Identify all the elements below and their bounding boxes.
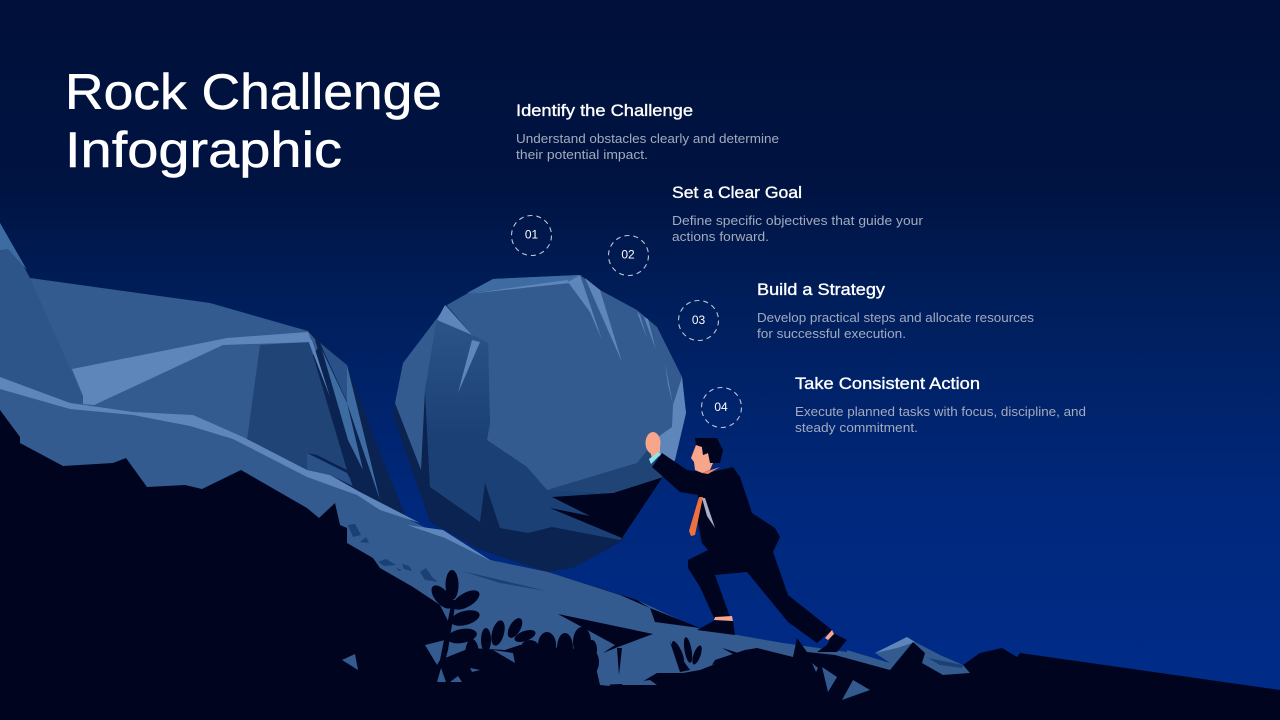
man suit and legs bbox=[652, 453, 832, 643]
boulder shaded body bbox=[425, 275, 686, 540]
step 04 bbox=[702, 374, 1086, 435]
boulder underside bbox=[550, 472, 666, 538]
illustration: businessman pushing boulder bbox=[646, 432, 847, 652]
title bbox=[65, 64, 442, 178]
marker 04: 04 bbox=[714, 400, 728, 414]
slope highlight bbox=[0, 377, 420, 523]
description 03: for successful execution. bbox=[757, 326, 906, 341]
description 03 bbox=[757, 310, 1035, 341]
description 02: actions forward. bbox=[672, 229, 769, 244]
man head bbox=[691, 438, 723, 473]
description 02 bbox=[672, 213, 924, 244]
description 01: Understand obstacles clearly and determine bbox=[516, 131, 779, 146]
man shoes bbox=[697, 620, 735, 635]
marker 02 bbox=[608, 236, 648, 276]
marker 02: 02 bbox=[621, 248, 635, 262]
marker 03: 03 bbox=[692, 313, 705, 327]
boulder left lobe bbox=[425, 320, 527, 487]
illustration: boulder bbox=[392, 275, 686, 572]
man ankles bbox=[714, 616, 733, 621]
description 03: Develop practical steps and allocate resources bbox=[757, 310, 1035, 325]
man hand bbox=[646, 432, 660, 458]
slope pebbles bbox=[348, 524, 361, 537]
heading 01: Identify the Challenge bbox=[516, 101, 693, 120]
title: Rock Challenge bbox=[65, 64, 442, 120]
man tie bbox=[689, 497, 703, 536]
description 04: Execute planned tasks with focus, discipline, and bbox=[795, 404, 1086, 419]
description 01 bbox=[516, 131, 779, 162]
title: Infographic bbox=[65, 122, 342, 178]
description 01: their potential impact. bbox=[516, 147, 648, 162]
illustration: dark foreground silhouette bbox=[0, 410, 1280, 720]
boulder shadow bbox=[392, 380, 625, 572]
man collar bbox=[702, 467, 720, 474]
man cuff bbox=[649, 452, 661, 464]
marker 03 bbox=[678, 300, 718, 340]
marker 01 bbox=[512, 216, 552, 256]
marker 01: 01 bbox=[525, 228, 538, 242]
illustration: blue gaps in foreground bbox=[342, 650, 870, 700]
heading 03: Build a Strategy bbox=[757, 280, 886, 299]
illustration: distant rock on the right bbox=[847, 637, 972, 680]
step 03 bbox=[678, 280, 1035, 341]
slope crack shadows bbox=[462, 571, 547, 591]
illustration: foreground plants bbox=[428, 570, 759, 684]
description 04: steady commitment. bbox=[795, 420, 918, 435]
description 02: Define specific objectives that guide your bbox=[672, 213, 924, 228]
illustration: rock slab on the left bbox=[0, 223, 420, 530]
illustration: sloped hillside bbox=[0, 377, 960, 700]
boulder face bbox=[447, 275, 686, 493]
heading 02: Set a Clear Goal bbox=[672, 183, 802, 202]
man shirt bbox=[702, 498, 715, 528]
description 04 bbox=[795, 404, 1086, 435]
step 01 bbox=[512, 101, 779, 256]
boulder highlights bbox=[467, 275, 580, 293]
heading 04: Take Consistent Action bbox=[795, 374, 980, 393]
marker 04 bbox=[702, 388, 742, 428]
step 02 bbox=[608, 183, 924, 276]
